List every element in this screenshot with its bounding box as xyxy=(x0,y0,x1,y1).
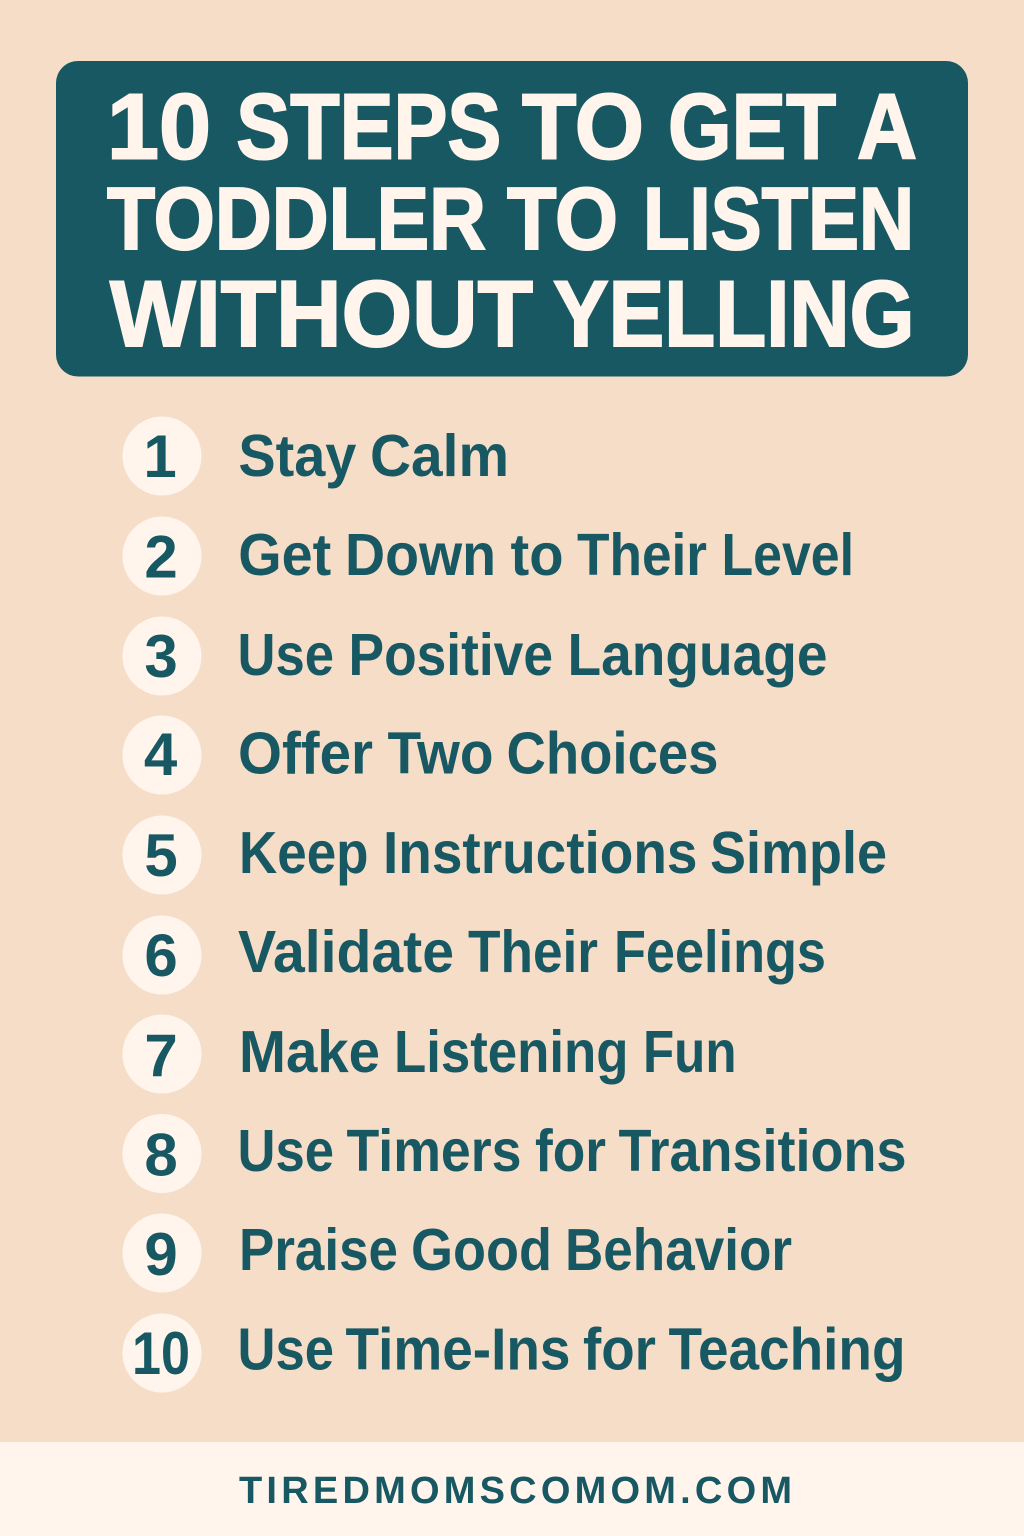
step 3: 3 xyxy=(144,623,178,690)
step 10: Teaching xyxy=(668,1316,906,1382)
title line 1: TO xyxy=(522,74,644,178)
step 7 xyxy=(122,1014,736,1094)
footer band xyxy=(0,1442,1024,1536)
step 6: Feelings xyxy=(614,919,826,985)
step 10: for xyxy=(583,1316,656,1382)
step 8 xyxy=(122,1114,906,1193)
step 10: Use xyxy=(238,1316,334,1382)
step 7: 7 xyxy=(144,1022,178,1089)
step 9: Good xyxy=(411,1217,552,1283)
title line 2: TODDLER xyxy=(107,169,486,268)
step 2: Their xyxy=(577,522,707,588)
step 2: Level xyxy=(722,522,854,588)
step 10: 10 xyxy=(132,1320,190,1387)
step 1: Calm xyxy=(370,423,509,489)
step 9: 9 xyxy=(144,1221,178,1288)
step 8: for xyxy=(535,1118,606,1184)
step 7: Listening xyxy=(394,1019,628,1085)
step 10: Time-Ins xyxy=(346,1316,570,1382)
step 1: 1 xyxy=(143,423,177,490)
title line 3: WITHOUT xyxy=(110,261,533,366)
step 4: Choices xyxy=(506,720,718,786)
step 7: Fun xyxy=(643,1019,736,1085)
step 2 xyxy=(122,516,854,596)
step 4: 4 xyxy=(144,721,178,788)
step 5 xyxy=(122,816,887,894)
title line 2: LISTEN xyxy=(643,169,914,268)
step 1 xyxy=(122,416,509,496)
step 9: Behavior xyxy=(565,1217,792,1283)
title line 1: STEPS xyxy=(236,74,501,178)
title line 1: 10 xyxy=(107,74,211,178)
step 2: to xyxy=(510,522,564,588)
step 6: 6 xyxy=(144,922,178,989)
step 8: Transitions xyxy=(618,1118,906,1184)
step 5: Instructions xyxy=(383,820,698,886)
step 5: 5 xyxy=(144,822,178,889)
title line 1: A xyxy=(857,74,917,178)
step 8: 8 xyxy=(144,1122,178,1188)
step 2: Down xyxy=(345,522,496,588)
step 2: Get xyxy=(238,522,331,588)
title line 2: TO xyxy=(507,169,618,268)
title banner xyxy=(56,61,968,376)
step 8: Use xyxy=(238,1118,334,1184)
step 4: Offer xyxy=(238,720,373,786)
steps list xyxy=(122,416,906,1392)
title line 1: GET xyxy=(668,74,836,178)
step 6: Validate xyxy=(238,919,454,985)
step 6 xyxy=(122,916,826,994)
title line 3: YELLING xyxy=(553,261,914,366)
step 2: 2 xyxy=(144,524,178,590)
step 5: Simple xyxy=(710,820,887,886)
footer website: TIREDMOMSCOMOM.COM xyxy=(239,1470,792,1512)
step 9 xyxy=(122,1214,792,1292)
step 8: Timers xyxy=(346,1118,522,1184)
step 3: Positive xyxy=(348,622,553,688)
step 9: Praise xyxy=(239,1217,398,1283)
step 6: Their xyxy=(468,919,598,985)
step 4 xyxy=(122,716,718,794)
step 3 xyxy=(122,616,828,696)
step 7: Make xyxy=(239,1019,380,1085)
step 3: Language xyxy=(568,622,828,688)
step 5: Keep xyxy=(239,820,368,886)
step 10 xyxy=(122,1314,906,1392)
step 3: Use xyxy=(238,622,334,688)
step 1: Stay xyxy=(238,423,357,489)
step 4: Two xyxy=(388,720,494,786)
